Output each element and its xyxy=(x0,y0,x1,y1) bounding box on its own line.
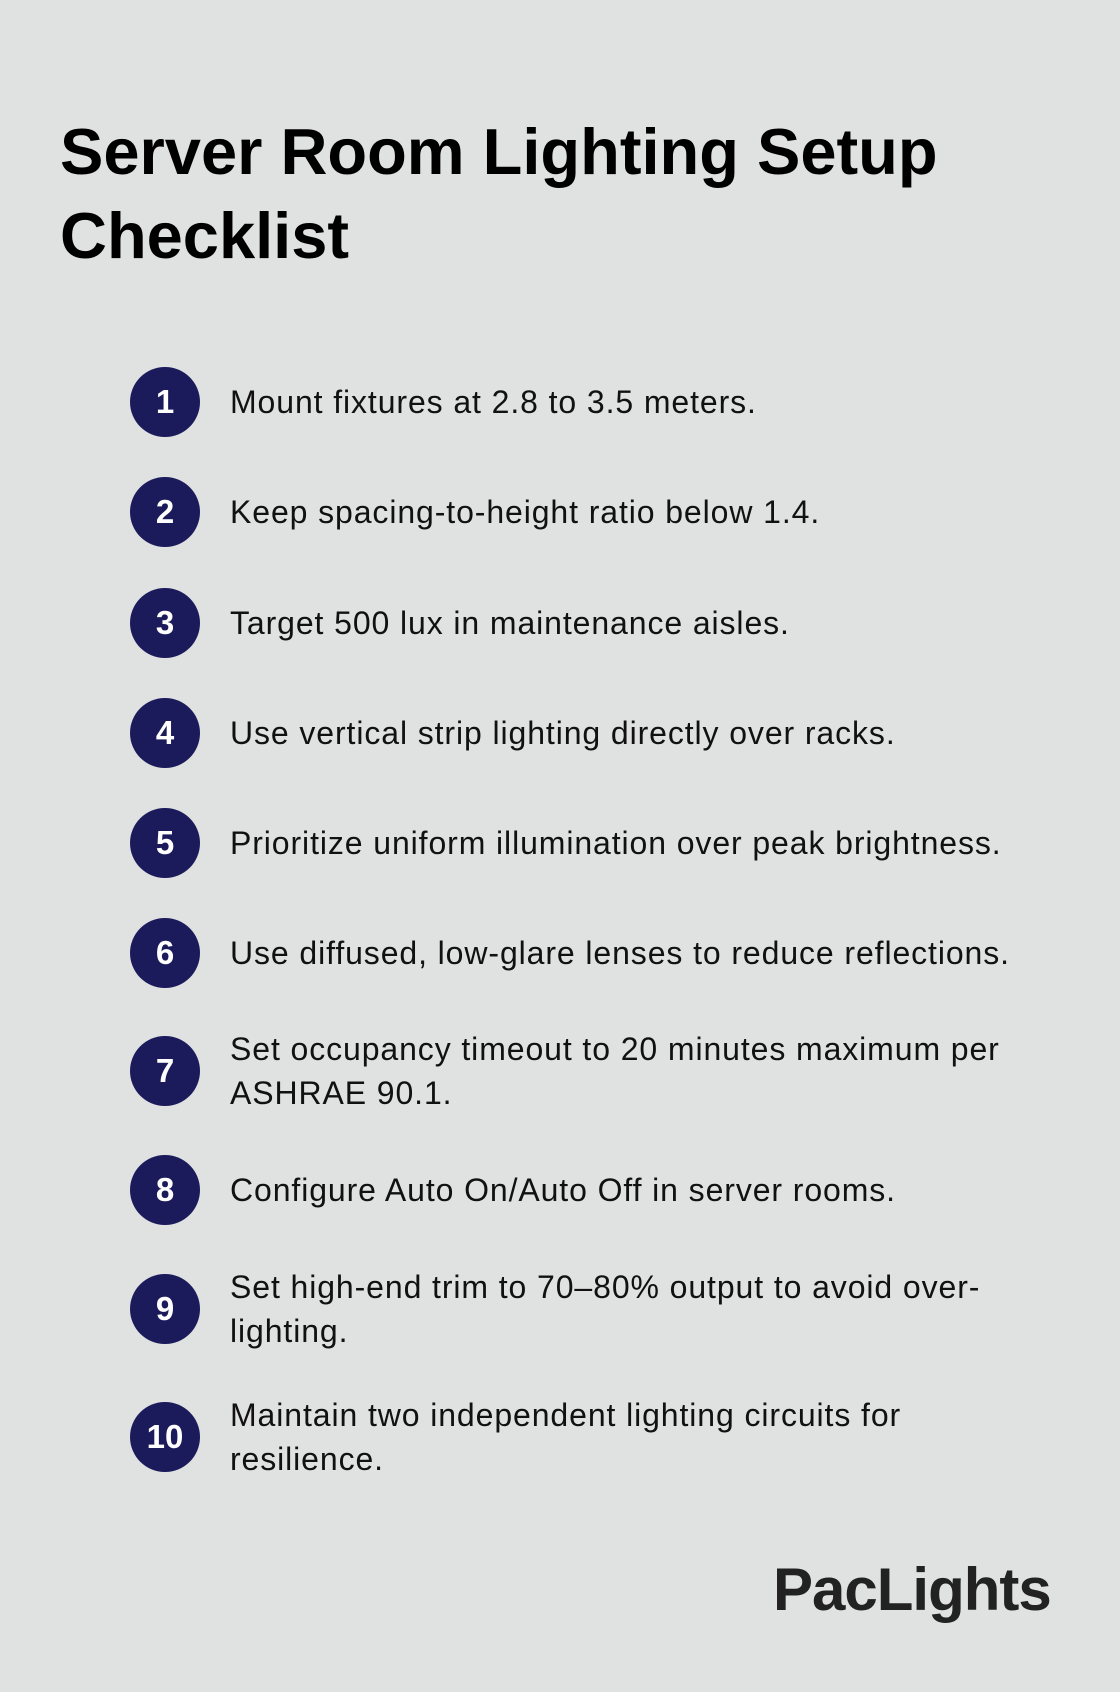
item 1 xyxy=(130,367,757,437)
item 10: resilience. xyxy=(230,1441,384,1477)
item 7: 7 xyxy=(156,1052,174,1089)
item 9: 9 xyxy=(156,1290,174,1327)
item 3: 3 xyxy=(156,604,174,641)
item 8: Configure Auto On/Auto Off in server rooms. xyxy=(230,1172,896,1208)
item 8 xyxy=(130,1155,896,1225)
logo: PacLights xyxy=(773,1556,1051,1623)
item 8: 8 xyxy=(156,1171,174,1208)
item 2: 2 xyxy=(156,493,174,530)
item 6 xyxy=(130,918,1010,988)
item 1: 1 xyxy=(156,383,174,420)
item 9: Set high-end trim to 70–80% output to avoid over- xyxy=(230,1269,980,1305)
item 3: Target 500 lux in maintenance aisles. xyxy=(230,605,790,641)
item 7 xyxy=(130,1031,1000,1111)
item 3 xyxy=(130,588,790,658)
item 6: Use diffused, low-glare lenses to reduce reflections. xyxy=(230,935,1010,971)
item 7: ASHRAE 90.1. xyxy=(230,1075,452,1111)
item 9: lighting. xyxy=(230,1313,348,1349)
item 5: 5 xyxy=(156,824,174,861)
item 7: Set occupancy timeout to 20 minutes maximum per xyxy=(230,1031,1000,1067)
item 4: 4 xyxy=(156,714,174,751)
item 10: 10 xyxy=(147,1418,183,1455)
item 6: 6 xyxy=(156,934,174,971)
item 4 xyxy=(130,698,896,768)
item 10 xyxy=(130,1397,901,1477)
title xyxy=(60,115,938,272)
item 2: Keep spacing-to-height ratio below 1.4. xyxy=(230,494,820,530)
item 9 xyxy=(130,1269,980,1349)
title: Server Room Lighting Setup xyxy=(60,115,938,188)
item 5 xyxy=(130,808,1002,878)
item 4: Use vertical strip lighting directly over racks. xyxy=(230,715,896,751)
title: Checklist xyxy=(60,199,349,272)
item 2 xyxy=(130,477,820,547)
item 1: Mount fixtures at 2.8 to 3.5 meters. xyxy=(230,384,757,420)
item 10: Maintain two independent lighting circuits for xyxy=(230,1397,901,1433)
item 5: Prioritize uniform illumination over peak brightness. xyxy=(230,825,1002,861)
